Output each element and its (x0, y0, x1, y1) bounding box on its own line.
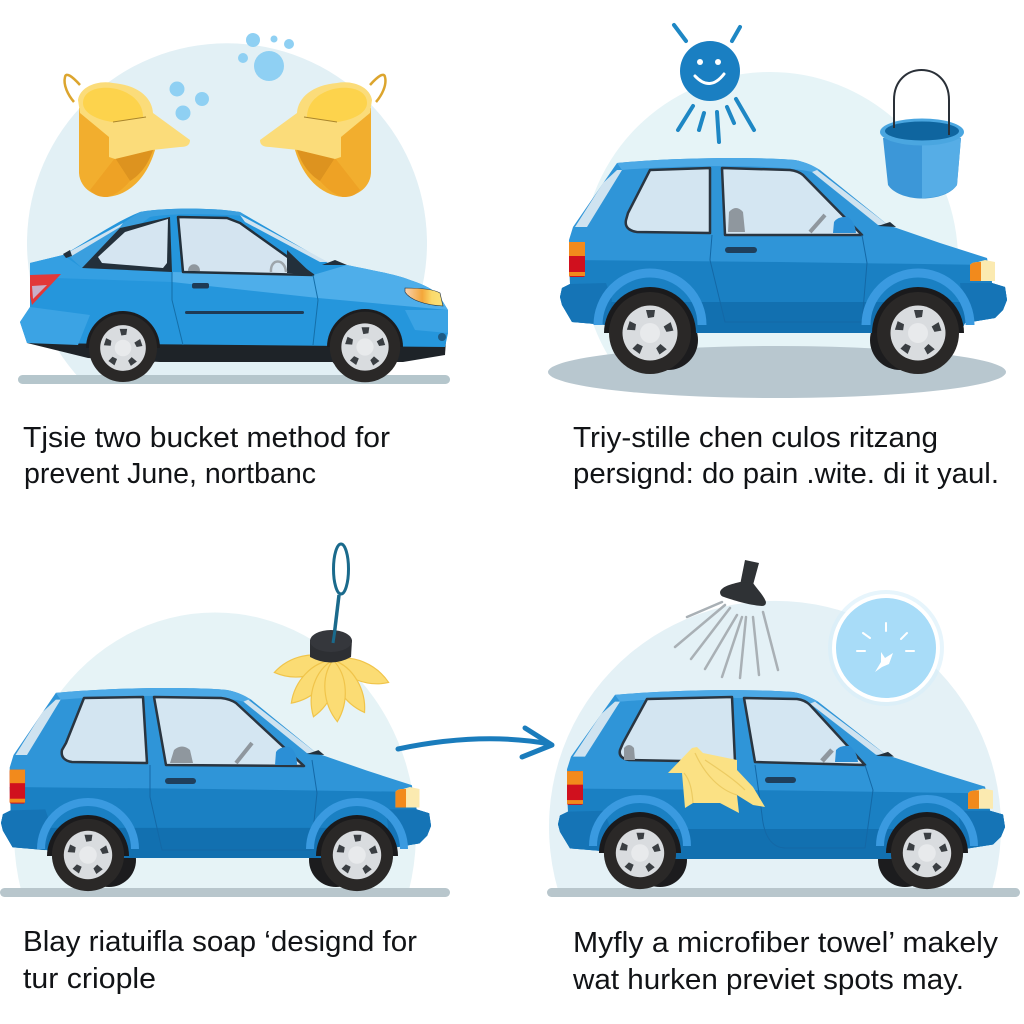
panel: soap duster car (0, 544, 552, 897)
background circle (27, 43, 427, 380)
door handle (765, 777, 796, 783)
ground shadow (547, 888, 1020, 897)
yellow microfiber towel (668, 747, 765, 813)
headlight (405, 288, 443, 306)
background circle (14, 612, 416, 890)
background circle (582, 72, 958, 372)
door handle (725, 247, 757, 253)
icon: right yellow bucket (260, 75, 385, 197)
caption: panel 1: prevent June, nortbanc (24, 458, 316, 490)
rear window (626, 168, 710, 233)
caption: panel 3 (23, 926, 417, 995)
door handle (192, 283, 209, 288)
panel: two bucket method (18, 33, 450, 384)
front window (178, 217, 313, 275)
panel: microfiber towel car (547, 560, 1020, 897)
icon: shower head (675, 560, 778, 678)
icon: duster brush (272, 544, 392, 722)
icon: blue bucket (880, 70, 964, 198)
door handle (165, 778, 196, 784)
icon: soap bubbles (170, 33, 294, 120)
front arch and wheel (327, 309, 403, 347)
caption: panel 2: Triy-stille chen culos ritzang (573, 422, 938, 454)
car: blue hatchback (558, 690, 1005, 889)
front arch and wheel (310, 802, 404, 849)
caption: panel 2: persignd: do pain .wite. di it yaul. (573, 458, 999, 490)
caption: panel 4 (572, 927, 999, 996)
front window (744, 698, 865, 765)
front window (154, 697, 304, 766)
front arch and wheel (880, 799, 974, 846)
icon: smiling sun (674, 25, 754, 142)
rear arch and wheel (598, 273, 702, 325)
caption: panel 1: Tjsie two bucket method for (23, 422, 390, 454)
caption: panel 1 (23, 422, 390, 490)
panel: sun and bucket car (548, 25, 1007, 398)
rear window (62, 697, 147, 763)
ground shadow (0, 888, 450, 897)
ground shadow (548, 346, 1006, 398)
caption: panel 3: tur criople (23, 963, 156, 995)
caption: panel 2 (573, 422, 999, 490)
ground shadow (18, 375, 450, 384)
icon: sparkle clock badge (828, 590, 944, 706)
front window (722, 168, 862, 235)
caption: panel 4: Myfly a microfiber towel’ makely (573, 927, 999, 959)
caption: panel 3: Blay riatuifla soap ‘designd for (23, 926, 417, 958)
rear arch and wheel (41, 802, 135, 849)
rear window (82, 217, 172, 272)
car: blue hatchback (1, 688, 431, 891)
tail light (30, 274, 61, 305)
rear arch and wheel (86, 311, 160, 348)
rear window (620, 697, 735, 762)
car: blue hatchback (560, 158, 1007, 374)
rear arch and wheel (593, 799, 687, 846)
arrow (398, 728, 552, 757)
background circle (549, 601, 1001, 890)
front arch and wheel (866, 273, 970, 325)
icon: left yellow bucket (65, 75, 190, 197)
caption: panel 4: wat hurken previet spots may. (572, 964, 964, 996)
car: blue coupe (20, 209, 448, 382)
